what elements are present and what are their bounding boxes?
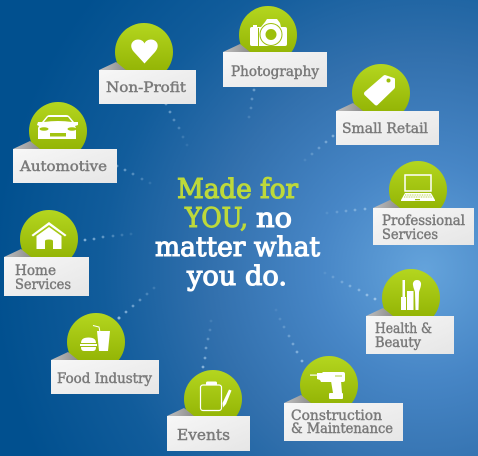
headline [155, 174, 320, 292]
badge: Non-Profit [99, 23, 196, 104]
badge: Health and Beauty: Beauty [375, 335, 421, 351]
icon: drill [310, 372, 345, 399]
badge: Professional Services [373, 161, 474, 245]
badge: Health and Beauty [366, 269, 454, 354]
badge: Health and Beauty: Health & [375, 321, 432, 337]
icon: camera [250, 19, 287, 46]
dotted connector lines [84, 89, 376, 368]
icon: laptop [401, 175, 435, 201]
badge: Construction and Maintenance [284, 356, 403, 441]
badge: Home Services [4, 210, 89, 296]
badge: Professional Services: Services [382, 227, 438, 243]
badge: Food Industry [51, 313, 159, 394]
badge: Construction and Maintenance: & Maintenance [291, 421, 393, 437]
headline: matter what [155, 232, 320, 263]
icon: price tag [364, 75, 395, 106]
headline: no [256, 203, 292, 234]
badge: Automotive: Automotive [19, 159, 107, 175]
badge: Construction and Maintenance: Construction [291, 408, 382, 424]
icon: car [37, 115, 78, 139]
badge: Home Services: Home [15, 263, 56, 279]
headline: YOU, [184, 203, 248, 234]
badge: Food Industry: Food Industry [57, 371, 152, 387]
badge: Photography: Photography [231, 64, 319, 80]
badge: Non-Profit: Non-Profit [106, 80, 187, 96]
badge: Small Retail [336, 64, 439, 145]
badge: Automotive [13, 102, 117, 183]
icon: burger and drink [80, 326, 110, 351]
icon: heart [131, 40, 158, 64]
badge: Small Retail: Small Retail [342, 121, 428, 137]
badge: Photography [223, 6, 327, 87]
badge: Events [167, 370, 250, 451]
badge: Home Services: Services [15, 277, 71, 293]
headline: Made for [177, 174, 298, 205]
icon: house [32, 222, 66, 249]
headline: you do. [186, 261, 287, 292]
badge: Professional Services: Professional [382, 213, 465, 229]
icon: makeup [401, 280, 421, 310]
icon: clipboard and pencil [200, 382, 232, 410]
badge: Events: Events [177, 426, 230, 444]
